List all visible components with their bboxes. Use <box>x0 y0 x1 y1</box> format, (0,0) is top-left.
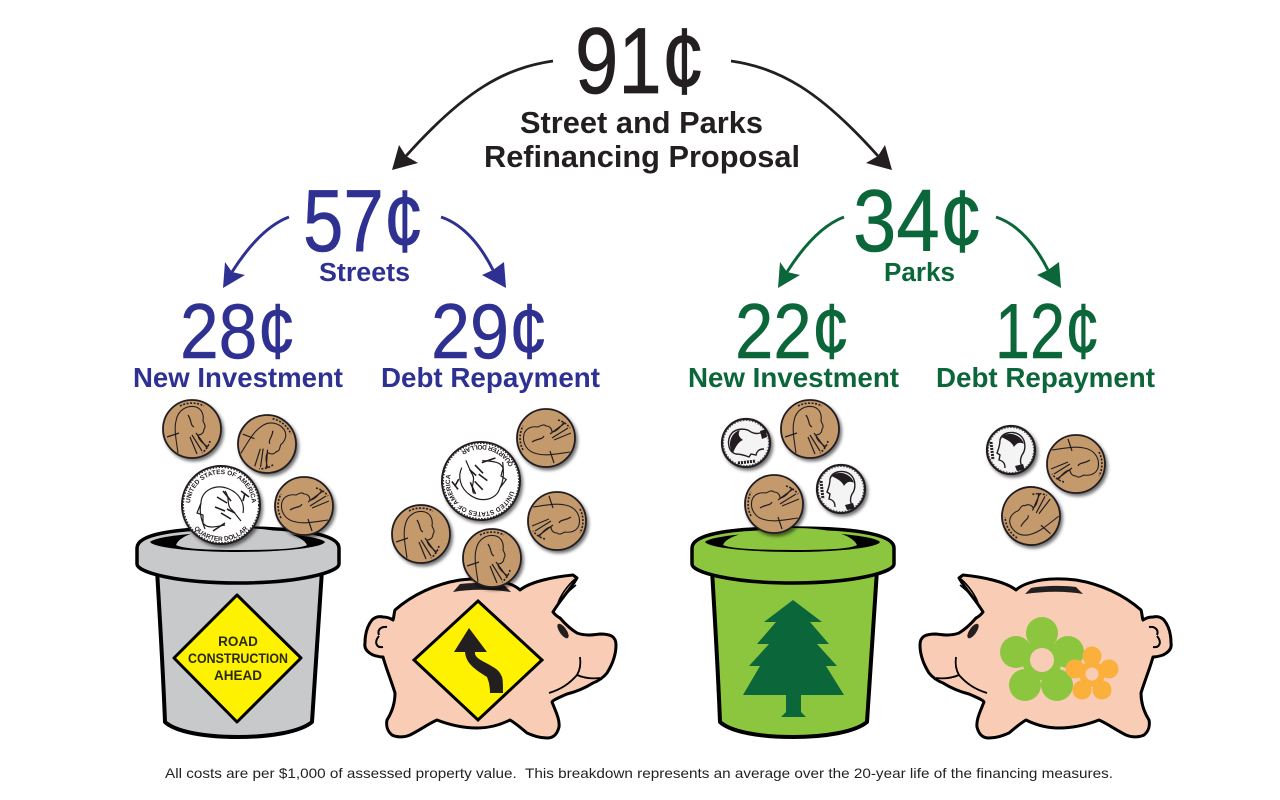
road construction sign: CONSTRUCTION <box>188 651 288 666</box>
icon: evergreen tree <box>743 600 844 717</box>
parks column headings <box>688 171 1155 393</box>
streets amount: 57¢ <box>303 171 424 270</box>
parks new investment label: New Investment <box>688 362 899 393</box>
icon: orange flower <box>1066 646 1118 700</box>
arrow: streets to debt repayment <box>441 217 506 288</box>
parks amount: 34¢ <box>853 171 983 270</box>
green parks bucket <box>692 528 894 737</box>
curvy road sign <box>414 601 542 720</box>
gray road construction bucket <box>137 528 339 737</box>
coins above parks piggy bank <box>987 426 1105 556</box>
coins falling into street piggy bank <box>392 409 586 587</box>
heading: Street and Parks Refinancing Proposal: Refinancing Proposal <box>484 140 800 174</box>
coins falling into parks bucket <box>722 400 865 533</box>
parks new investment amount: 22¢ <box>735 287 850 375</box>
streets column headings <box>133 171 600 393</box>
icon: green flower <box>1000 617 1084 701</box>
road construction sign: ROAD <box>218 634 258 649</box>
arrow: parks to new investment <box>778 217 844 288</box>
streets debt repayment amount: 29¢ <box>431 287 548 375</box>
main amount: 91 cents: 91¢ <box>575 8 705 113</box>
heading: Street and Parks Refinancing Proposal: Street and Parks <box>520 106 763 140</box>
icon: winding road arrow <box>454 628 503 693</box>
heading: Street and Parks Refinancing Proposal <box>484 106 800 174</box>
arrow: 91 cents to parks <box>731 61 892 170</box>
piggy bank: street debt <box>365 575 616 738</box>
streets debt repayment label: Debt Repayment <box>381 362 600 393</box>
footnote: All costs are per $1,000 of assessed property value. This breakdown represents an average over the 20-year life of the financing measures. <box>165 765 1113 781</box>
road construction sign: AHEAD <box>214 668 262 683</box>
arrow: parks to debt repayment <box>996 217 1061 288</box>
arrow: streets to new investment <box>223 217 289 288</box>
streets label: Streets <box>319 259 410 287</box>
parks debt repayment amount: 12¢ <box>995 287 1100 375</box>
coins falling into street construction bucket <box>163 400 333 544</box>
arrow: 91 cents to streets <box>392 61 553 170</box>
streets new investment amount: 28¢ <box>180 287 296 375</box>
piggy bank: parks debt <box>920 575 1171 738</box>
road construction sign <box>174 595 301 722</box>
streets new investment label: New Investment <box>133 362 343 393</box>
parks label: Parks <box>884 259 955 287</box>
parks debt repayment label: Debt Repayment <box>936 362 1155 393</box>
